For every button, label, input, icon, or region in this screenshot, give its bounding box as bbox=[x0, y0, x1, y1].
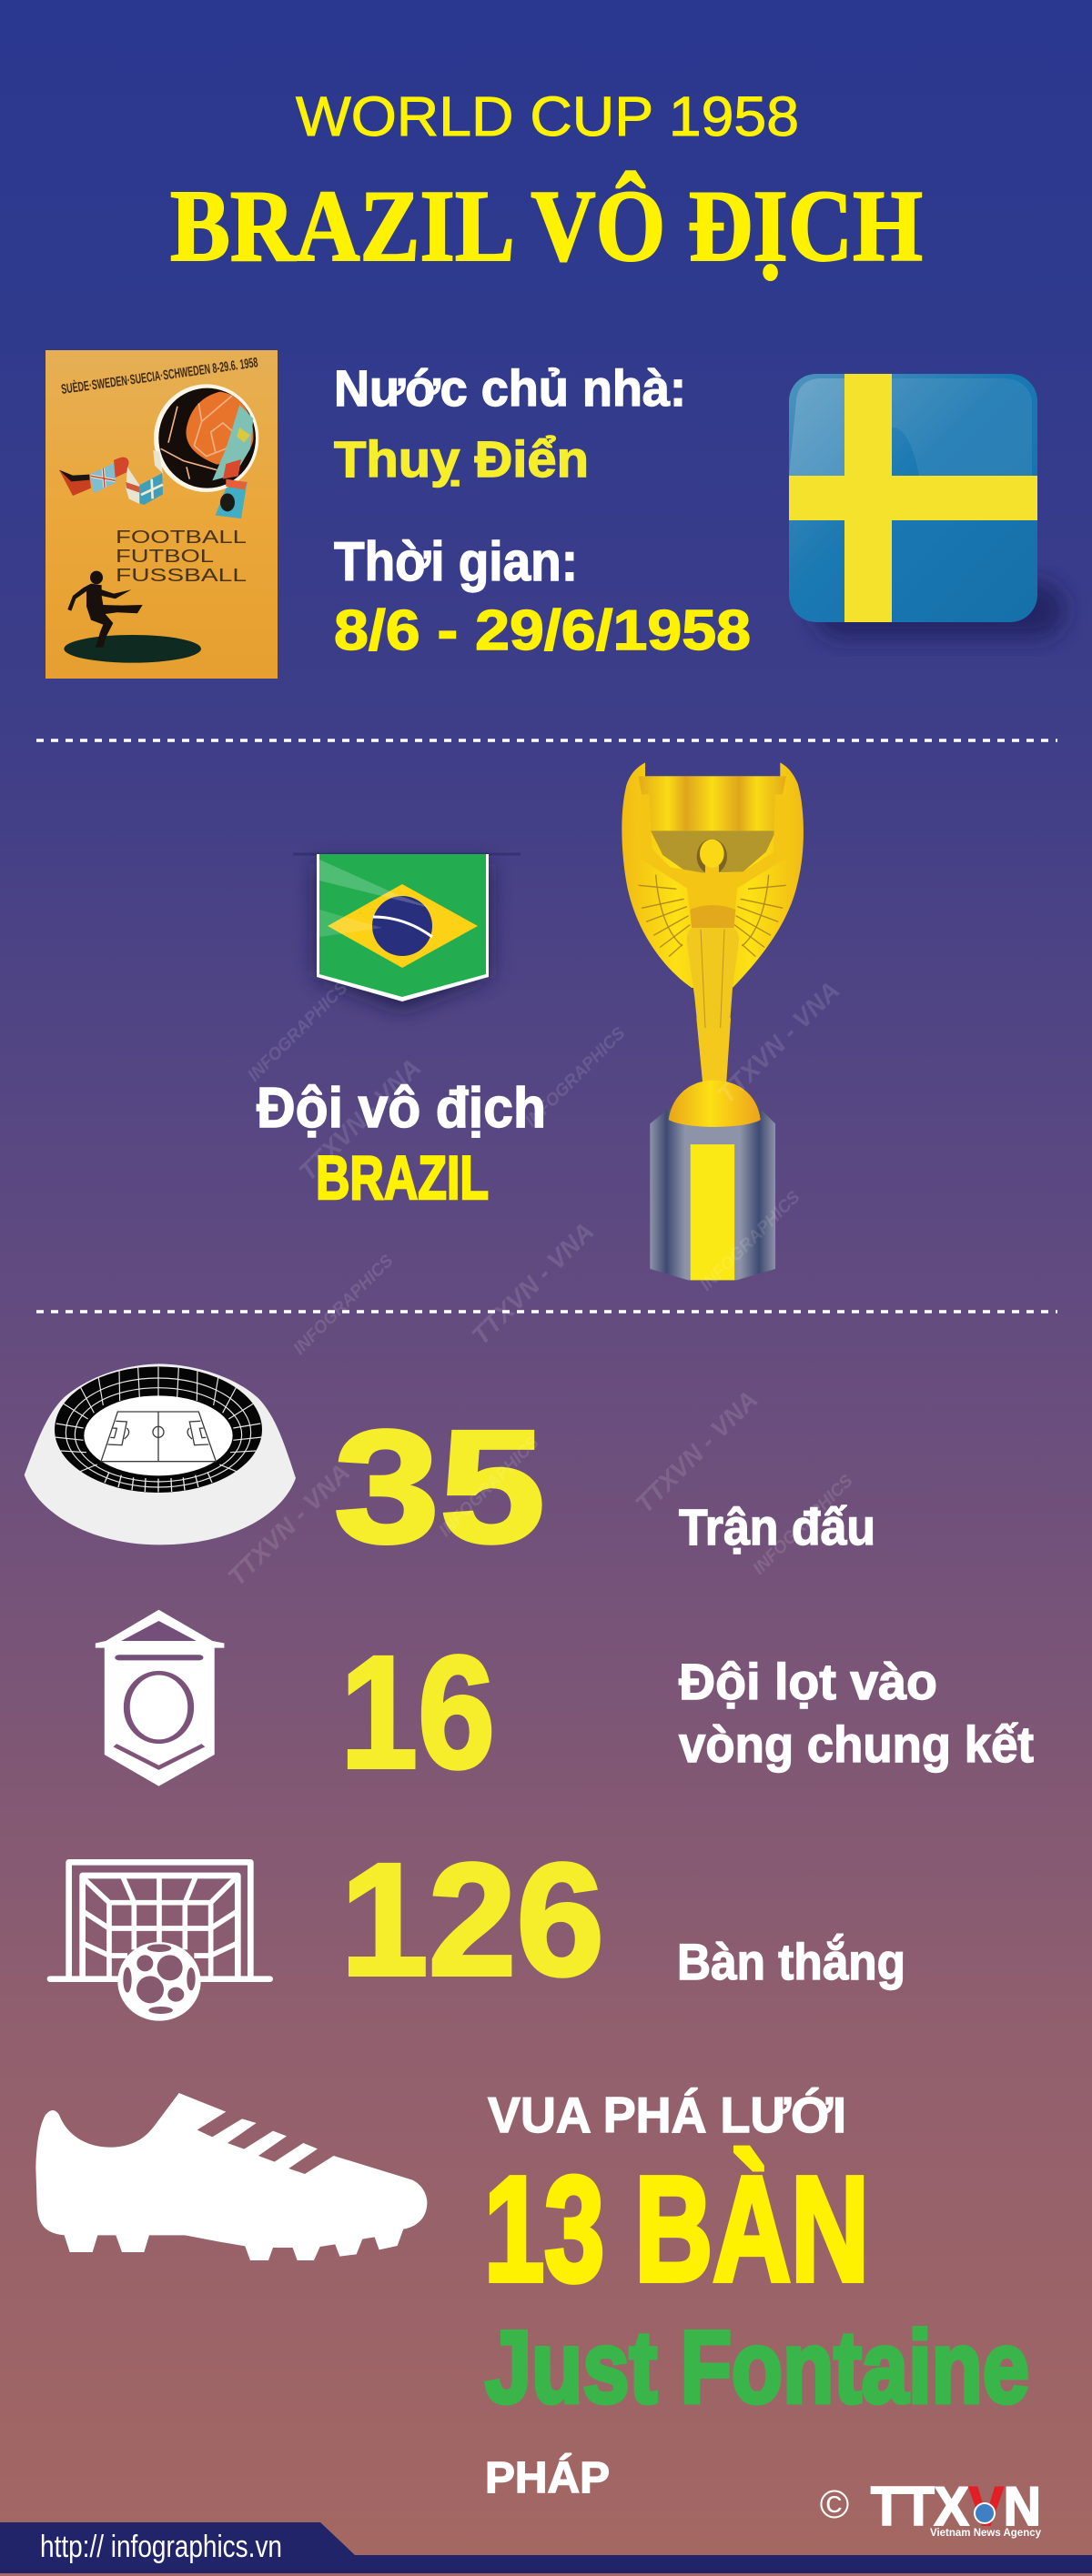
text: champion team: BRAZIL bbox=[316, 1143, 489, 1213]
watermarks: INFOGRAPHICS bbox=[245, 978, 352, 1086]
text: champion team: Đội vô địch bbox=[257, 1077, 546, 1140]
stat: 16 teams bbox=[340, 1624, 1034, 1802]
watermarks bbox=[222, 976, 857, 1591]
panel: 1958 poster: SUÈDE·SWEDEN·SUECIA·SCHWEDEN 8-29.6. 1958 bbox=[60, 355, 258, 397]
panel: 1958 poster: FUSSBALL bbox=[116, 566, 247, 586]
logo: TTXVN: © bbox=[820, 2482, 849, 2527]
icon: pennant bbox=[96, 1610, 224, 1786]
trophy upper figure bbox=[622, 762, 804, 1028]
watermarks: INFOGRAPHICS bbox=[750, 1471, 857, 1579]
icon: Brazil flag ribbon bbox=[293, 854, 521, 1010]
poster flag ribbon bbox=[59, 450, 248, 518]
dashed divider: bottom bbox=[36, 1310, 1057, 1313]
watermarks: TTXVN - VNA bbox=[466, 1217, 600, 1350]
text: top scorer: 13 BÀN bbox=[484, 2146, 869, 2312]
watermarks: TTXVN - VNA bbox=[293, 1053, 427, 1186]
panel: 1958 poster: FUTBOL bbox=[116, 547, 214, 567]
stat: 16 teams: Đội lọt vào bbox=[679, 1653, 937, 1710]
stat: 16 teams: 16 bbox=[340, 1624, 495, 1802]
watermarks: INFOGRAPHICS bbox=[697, 1187, 804, 1295]
footer url: http:// infographics.vn bbox=[40, 2530, 282, 2564]
icon: goal and ball bbox=[50, 1862, 270, 2021]
title: Brazil vô địch: BRAZIL VÔ ĐỊCH bbox=[170, 170, 923, 283]
stat: 126 goals bbox=[340, 1831, 905, 2009]
poster ball bbox=[154, 384, 258, 492]
stat: 126 goals: 126 bbox=[340, 1831, 604, 2009]
stat: 35 matches: Trận đấu bbox=[679, 1498, 875, 1555]
text: champion team bbox=[257, 1077, 546, 1213]
dashed divider: top bbox=[36, 739, 1057, 742]
text: dates bbox=[334, 531, 751, 662]
trophy base and dome bbox=[650, 1018, 775, 1280]
icon: Sweden flag bbox=[789, 374, 1065, 639]
panel: 1958 poster: FOOTBALL bbox=[116, 528, 247, 548]
stat: 16 teams: vòng chung kết bbox=[679, 1716, 1034, 1773]
watermarks: TTXVN - VNA bbox=[712, 976, 845, 1109]
text: dates: Thời gian: bbox=[334, 531, 578, 592]
text: top scorer bbox=[484, 2087, 1029, 2502]
watermarks: INFOGRAPHICS bbox=[436, 1433, 543, 1541]
footer band bbox=[0, 2522, 1092, 2573]
watermarks: INFOGRAPHICS bbox=[290, 1251, 398, 1359]
stat: 35 matches: 35 bbox=[334, 1398, 545, 1576]
stat: 126 goals: Bàn thắng bbox=[677, 1933, 905, 1990]
stat: 35 matches bbox=[334, 1398, 875, 1576]
text: host country: Thuỵ Điển bbox=[334, 430, 589, 488]
text: top scorer: VUA PHÁ LƯỚI bbox=[488, 2087, 846, 2143]
icon: football boot bbox=[35, 2093, 427, 2260]
watermarks: INFOGRAPHICS bbox=[522, 1023, 630, 1132]
icon: Jules Rimet trophy bbox=[622, 762, 804, 1280]
text: host country: Nước chủ nhà: bbox=[334, 359, 686, 417]
text: dates: 8/6 - 29/6/1958 bbox=[334, 599, 751, 662]
icon: stadium bbox=[25, 1363, 296, 1545]
watermarks: TTXVN - VNA bbox=[630, 1385, 763, 1518]
watermarks: TTXVN - VNA bbox=[222, 1458, 356, 1591]
title: World Cup 1958: WORLD CUP 1958 bbox=[296, 86, 799, 147]
text: top scorer: PHÁP bbox=[485, 2453, 610, 2502]
logo: TTXVN: Vietnam News Agency bbox=[930, 2526, 1041, 2539]
panel: 1958 poster bbox=[46, 350, 278, 679]
poster kicker and ground bbox=[64, 571, 201, 663]
text: host country bbox=[334, 359, 686, 488]
logo: TTXVN: TTXVN bbox=[871, 2476, 1041, 2537]
